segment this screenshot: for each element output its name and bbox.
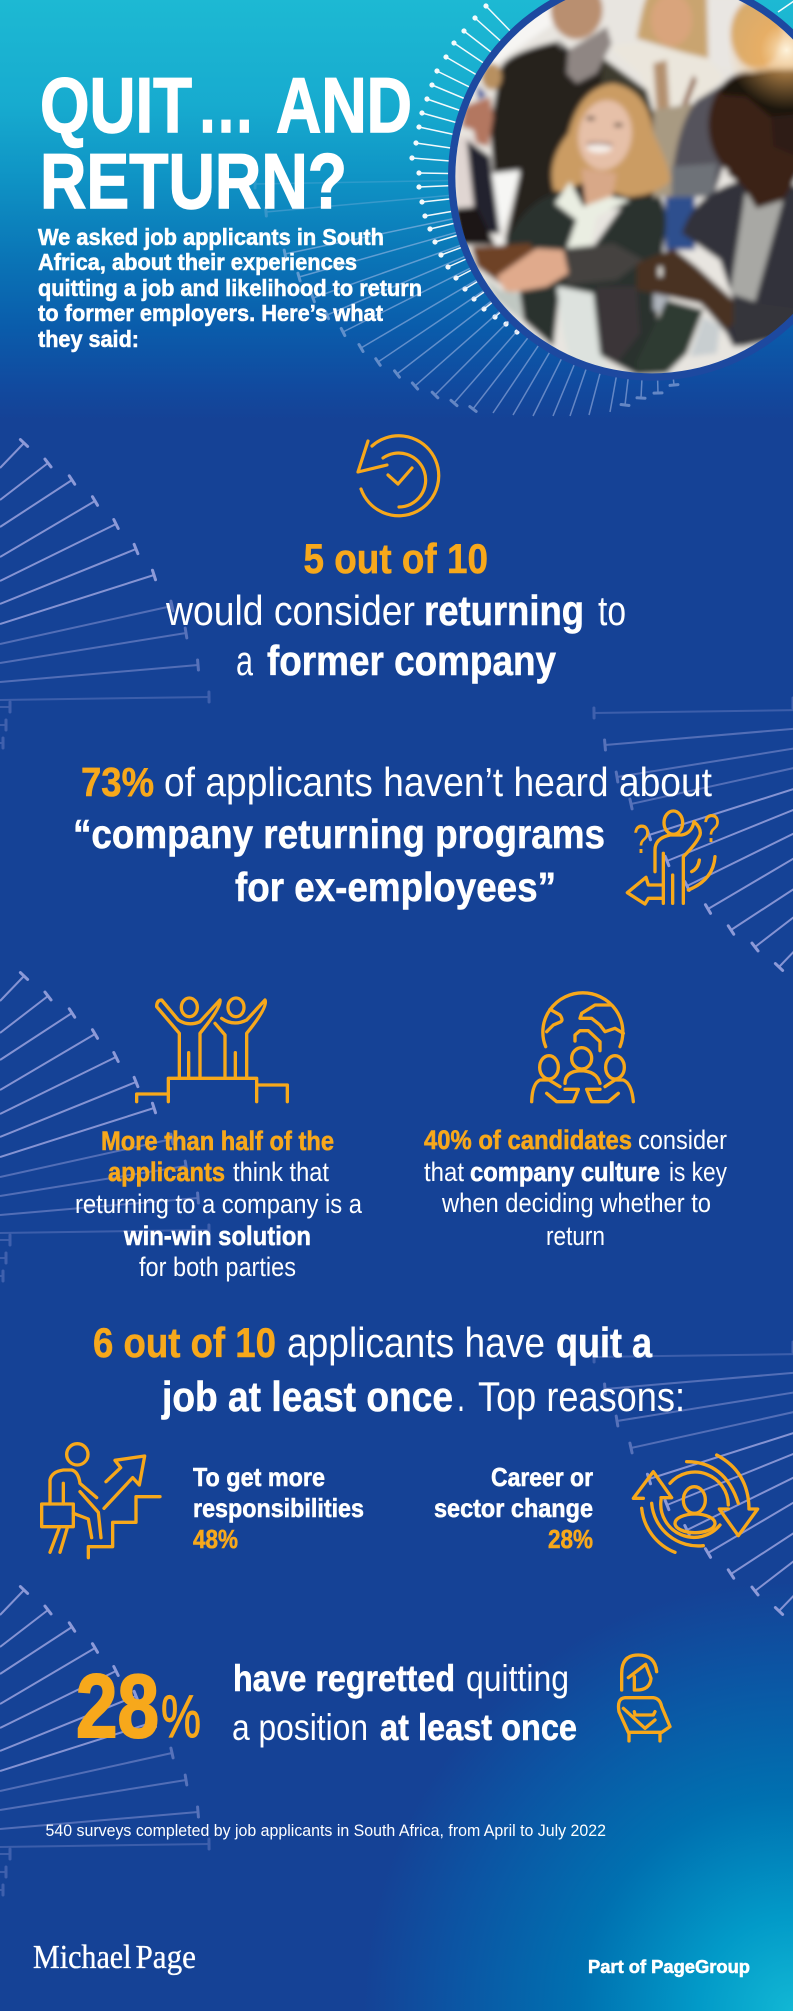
stat: 5 out of 10: a (236, 637, 253, 684)
stat: 73% of applicants: of applicants haven’t heard about (164, 759, 713, 805)
stat: 6 out of 10 have quit: applicants have (287, 1319, 545, 1366)
text: more than half of the applicants: think that (233, 1157, 329, 1187)
text: 40% of candidates (424, 1125, 727, 1251)
stat: 28% regretted: have regretted (233, 1658, 455, 1699)
intro paragraph: We asked job applicants in South (38, 224, 384, 250)
stat: 73% of applicants: “company returning programs (73, 811, 605, 857)
text: 40% of candidates: company culture (470, 1157, 660, 1187)
title: AND (276, 61, 412, 149)
text: to get more responsibilities 48%: responsibilities (193, 1493, 364, 1523)
text: 40% of candidates: return (546, 1221, 605, 1251)
text: more than half of the applicants: win-win solution (123, 1221, 311, 1251)
text: 40% of candidates: is key (669, 1157, 727, 1187)
stat: 28% regretted: at least once (380, 1707, 577, 1748)
icon: two people on podium (137, 998, 287, 1102)
stat: 5 out of 10 (165, 535, 626, 684)
stat: 6 out of 10 have quit: quit a (556, 1319, 653, 1366)
stat: 73% of applicants (73, 759, 713, 910)
panel: header photo of people shaking hands (440, 0, 793, 410)
logo: Michael Page: Page (136, 1939, 196, 1976)
text: career or sector change 28% (434, 1462, 593, 1554)
text: more than half of the applicants (75, 1126, 363, 1282)
stat: 28% regretted: quitting (466, 1658, 569, 1699)
stat: 28% regretted: a position (232, 1707, 368, 1748)
icon: clock with return arrow (358, 436, 439, 516)
icon: person with question marks and arrow (627, 807, 720, 904)
stat: 6 out of 10 have quit (93, 1319, 685, 1420)
stat: 5 out of 10: former company (267, 637, 557, 684)
text: 40% of candidates: that (424, 1157, 464, 1187)
stat: 5 out of 10: to (598, 587, 626, 634)
stat: 73% of applicants: 73% (81, 759, 154, 805)
text: career or sector change 28%: 28% (548, 1524, 593, 1554)
text: part of PageGroup: Part of PageGroup (588, 1957, 750, 1977)
intro paragraph (38, 224, 422, 352)
icon: person with question marks and arrow: ? (633, 816, 650, 862)
text: 40% of candidates: when deciding whether to (441, 1188, 711, 1218)
stat: 6 out of 10 have quit: job at least once (161, 1373, 453, 1420)
icon: person climbing stairs (42, 1444, 160, 1558)
text: more than half of the applicants: applicants (108, 1157, 225, 1187)
stat: 5 out of 10: would consider (165, 587, 415, 634)
intro paragraph: to former employers. Here’s what (38, 300, 383, 326)
text: to get more responsibilities 48%: 48% (193, 1524, 238, 1554)
icon: person with question marks and arrow: ? (703, 807, 720, 851)
intro paragraph: quitting a job and likelihood to return (38, 275, 422, 301)
text: more than half of the applicants: More than half of the (101, 1126, 334, 1156)
text: to get more responsibilities 48%: To get more (193, 1462, 325, 1492)
stat: 6 out of 10 have quit: 6 out of 10 (93, 1319, 276, 1366)
stat: 28% regretted: 28 (76, 1657, 159, 1757)
stat: 6 out of 10 have quit: . (457, 1373, 465, 1420)
icon: globe with group of people (532, 993, 633, 1102)
stat: 5 out of 10: 5 out of 10 (304, 535, 488, 582)
intro paragraph: Africa, about their experiences (38, 249, 357, 275)
footnote: 540 surveys completed by job applicants in South Africa, from April to July 2022 (46, 1822, 606, 1840)
stat: 28% regretted: % (161, 1683, 201, 1750)
stat: 73% of applicants: for ex-employees” (235, 864, 556, 910)
icon: person in cycle arrows (633, 1455, 758, 1552)
stat: 28% regretted (76, 1657, 577, 1757)
title: RETURN? (40, 137, 347, 225)
title: … (197, 61, 255, 149)
text: more than half of the applicants: for both parties (139, 1252, 296, 1282)
stat: 5 out of 10: returning (424, 587, 584, 634)
logo: Michael Page: Michael (33, 1939, 132, 1976)
text: 40% of candidates: 40% of candidates (424, 1125, 632, 1155)
title: QUIT (40, 61, 192, 149)
text: career or sector change 28%: Career or (491, 1462, 593, 1492)
text: more than half of the applicants: returning to a company is a (75, 1189, 363, 1219)
title (40, 61, 412, 225)
text: career or sector change 28%: sector change (434, 1493, 593, 1523)
icon: woman in armchair (618, 1655, 670, 1741)
logo: Michael Page (33, 1939, 196, 1976)
stat: 6 out of 10 have quit: Top reasons: (478, 1373, 685, 1420)
text: 40% of candidates: consider (638, 1125, 727, 1155)
text: to get more responsibilities 48% (193, 1462, 364, 1554)
intro paragraph: they said: (38, 326, 139, 352)
